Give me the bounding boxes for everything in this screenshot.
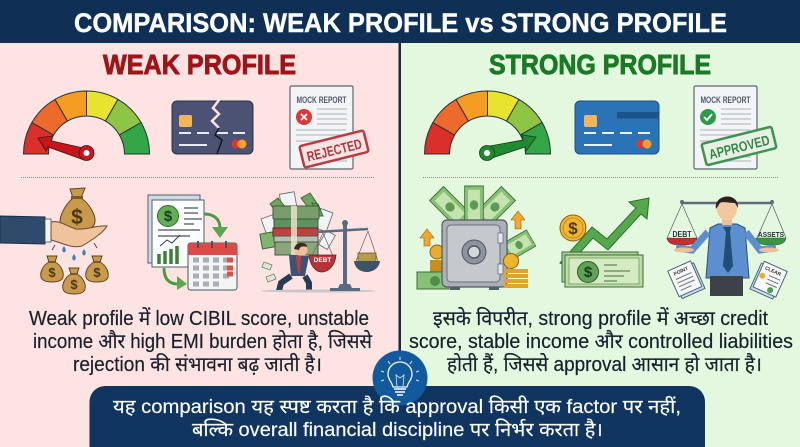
panel: strong profile <box>400 0 800 447</box>
callout: conclusion <box>90 350 705 447</box>
icon: rejected mock report: MOCK REPORT <box>296 95 347 106</box>
icon: rejected mock report: REJECTED <box>305 135 363 165</box>
icon: coin with growth arrow and cash: $ <box>568 219 578 238</box>
icon: person balancing debt and assets: POINT <box>673 266 689 278</box>
icon: person balancing debt and assets: ASSETS <box>758 230 784 239</box>
text: conclusion <box>113 395 681 441</box>
text: conclusion: बल्कि overall financial discipline पर निर्भर करता है। <box>192 418 603 441</box>
icon: coin with growth arrow and cash <box>560 198 649 287</box>
icon: rejected mock report <box>290 86 369 169</box>
icon: income report and calendar <box>148 195 237 290</box>
icon: healthy credit card <box>575 101 659 154</box>
text: weak profile description: rejection की संभावना बढ़ जाती है। <box>73 351 322 376</box>
icon: broken credit card <box>172 100 253 154</box>
icon: approved mock report: MOCK REPORT <box>700 95 751 106</box>
icon: safe with cash and coins <box>417 186 536 290</box>
divider <box>423 176 778 178</box>
text: strong profile description <box>409 306 793 376</box>
icon: high score gauge <box>424 91 551 160</box>
panel: weak profile <box>0 0 400 447</box>
text: weak profile description: Weak profile में low CIBIL score, unstable <box>29 307 369 330</box>
text: strong profile description: होती हैं, जिससे approval आसान हो जाता है। <box>447 351 762 376</box>
icon: man under debt burden with scale: DEBT <box>314 257 331 264</box>
icon: income report and calendar: $ <box>164 208 173 225</box>
heading: weak profile: WEAK PROFILE <box>103 49 296 80</box>
icon: approved mock report <box>694 86 777 169</box>
icon: low score gauge <box>23 91 150 160</box>
text: strong profile description: इसके विपरीत, strong profile में अच्छा credit <box>433 306 768 330</box>
center divider <box>398 42 401 447</box>
icon: coin with growth arrow and cash: $ <box>584 264 593 281</box>
text: weak profile description: income और high EMI burden होता है, जिससे <box>33 328 372 353</box>
title bar <box>0 0 800 43</box>
divider <box>21 176 375 178</box>
title bar: COMPARISON: WEAK PROFILE vs STRONG PROFILE <box>74 8 727 38</box>
icon: light bulb <box>372 350 428 406</box>
text: conclusion: यह comparison यह स्पष्ट करता है कि approval किसी एक factor पर नहीं, <box>113 395 681 418</box>
icon: hand with money bag and falling drops <box>0 188 108 294</box>
icon: person balancing debt and assets: CLEAR <box>764 265 782 278</box>
heading: strong profile: STRONG PROFILE <box>489 49 711 80</box>
icon: man under debt burden with scale <box>260 192 380 292</box>
icon: approved mock report: APPROVED <box>707 132 771 162</box>
text: strong profile description: score, stable income और controlled liabilities <box>409 329 793 353</box>
icon: person balancing debt and assets: DEBT <box>672 230 692 239</box>
icon: hand with money bag and falling drops: $ <box>71 206 83 229</box>
text: weak profile description <box>29 307 372 376</box>
icon: person balancing debt and assets <box>667 196 787 300</box>
